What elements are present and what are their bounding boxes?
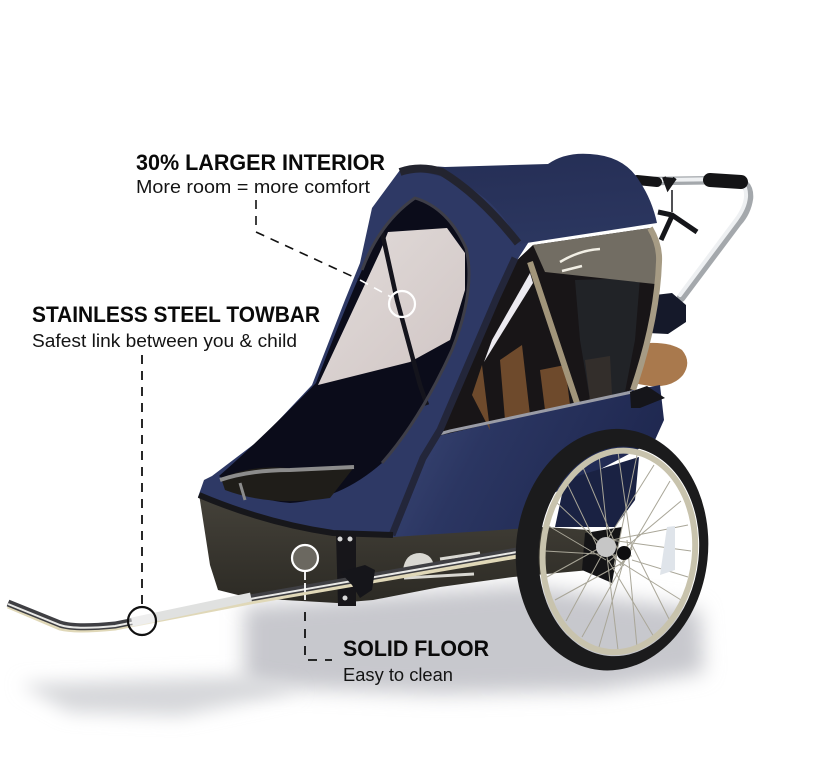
clamp bracket: [336, 534, 356, 606]
rear bracket: [646, 293, 686, 334]
description: Safest link between you & child: [32, 331, 297, 351]
leader line: [256, 200, 358, 279]
logo: [403, 553, 480, 578]
rim: [533, 443, 705, 660]
heading: SOLID FLOOR: [343, 636, 489, 661]
tow bar tube: [8, 551, 517, 630]
interior pole: [382, 232, 427, 405]
roof: [400, 154, 657, 244]
marker: [292, 545, 318, 571]
reflector: [660, 526, 675, 575]
spokes: [545, 452, 691, 650]
clear side window: [438, 228, 660, 436]
wheel: [504, 419, 720, 680]
ground shadow: [20, 585, 704, 716]
wheel interior: [555, 457, 639, 527]
marker: [128, 607, 156, 635]
hoop edge trim: [362, 198, 469, 463]
callout: 30% larger interior: [136, 150, 415, 317]
lower window trim: [403, 392, 632, 444]
mesh window: [318, 228, 465, 385]
reflections of seat: [472, 345, 612, 430]
description: Easy to clean: [343, 665, 453, 685]
heading: STAINLESS STEEL TOWBAR: [32, 302, 320, 327]
callout: stainless steel towbar: [32, 302, 320, 635]
clamp knob: [340, 565, 375, 598]
leader line: [141, 355, 143, 607]
hub: [596, 537, 616, 557]
brown storage bag: [638, 343, 687, 386]
lower side panel: [392, 385, 664, 540]
leader line: [304, 571, 306, 600]
straps: [658, 190, 697, 240]
inner seat: [221, 466, 355, 501]
canopy hoop and opening: [198, 167, 530, 540]
callout: solid floor: [292, 545, 489, 685]
trailer: [8, 154, 749, 680]
heading: 30% LARGER INTERIOR: [136, 150, 385, 175]
interior opening: [219, 198, 469, 503]
handlebar: [637, 177, 749, 298]
side velcro strip: [392, 258, 515, 535]
marker: [389, 291, 415, 317]
base tub: [199, 494, 590, 603]
description: More room = more comfort: [136, 177, 370, 197]
tyre: [504, 419, 720, 680]
lower bracket: [630, 386, 665, 408]
